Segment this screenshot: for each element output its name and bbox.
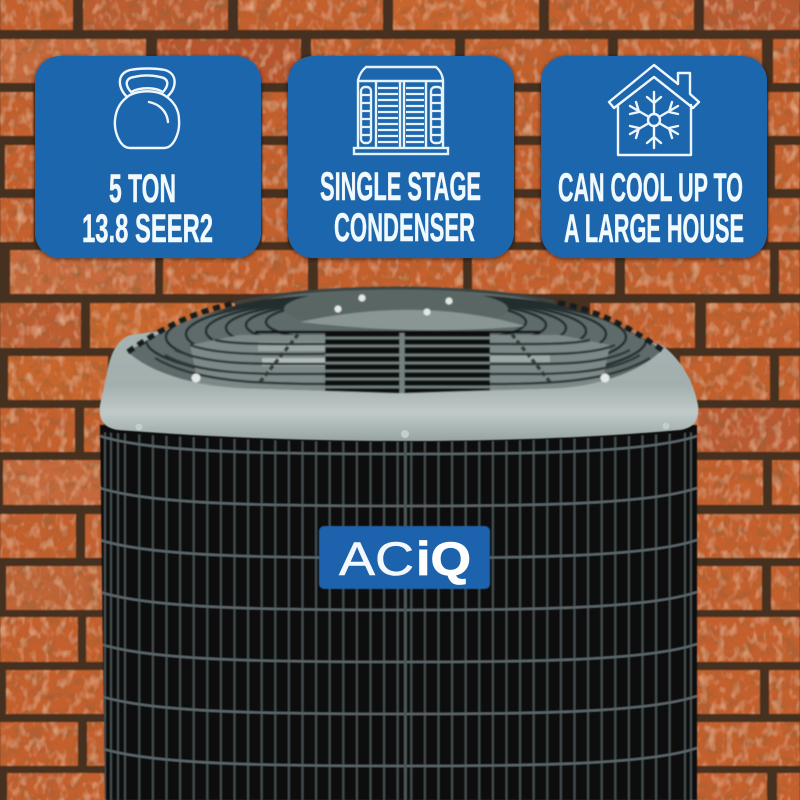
- top lid: [100, 300, 698, 441]
- fan centre hub: [283, 292, 509, 312]
- label: 13.8 SEER2: 13.8 SEER2: [82, 207, 213, 251]
- fan rim slots: [128, 303, 235, 352]
- ACiQ logo badge: iQ: [416, 532, 471, 585]
- condenser wire cabinet: [100, 425, 697, 800]
- icon: kettlebell: [115, 68, 179, 148]
- panel: single stage condenser: [288, 56, 514, 258]
- label: 5 ton: 5 TON: [109, 167, 176, 211]
- panel: can cool up to a large house: [541, 56, 767, 258]
- label: single stage: SINGLE STAGE: [320, 165, 481, 209]
- icon: condenser unit: [354, 67, 448, 154]
- fan front band: [190, 335, 610, 393]
- ACiQ logo badge: AC: [339, 532, 414, 585]
- lid screws: [136, 422, 670, 438]
- ACiQ logo badge: [319, 526, 490, 589]
- air conditioner condenser unit: [100, 288, 698, 800]
- panel: 5 ton 13.8 SEER2: [35, 56, 261, 258]
- icon: house with snowflake: [609, 65, 699, 155]
- label: condenser: CONDENSER: [334, 206, 475, 250]
- fan grille: [128, 288, 662, 393]
